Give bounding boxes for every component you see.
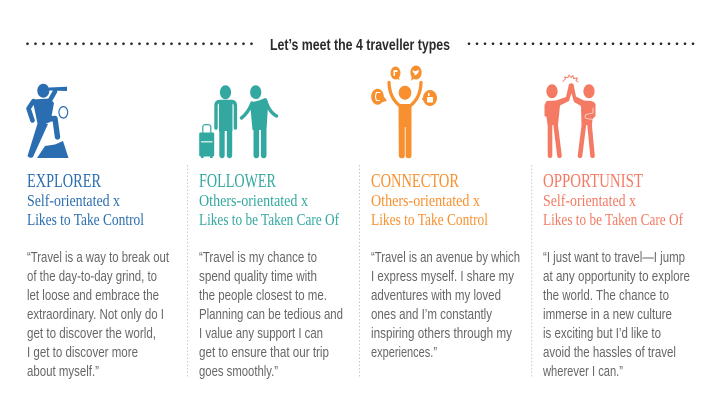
heading: connector: CONNECTOR <box>371 170 459 192</box>
quote: follower: I value any support I can <box>199 326 323 342</box>
icon: two people with suitcase <box>199 85 276 158</box>
quote: connector: experiences.” <box>371 345 437 361</box>
subtitle: connector: Likes to Take Control <box>371 210 488 229</box>
subtitle: opportunist: Likes to be Taken Care Of <box>543 210 683 229</box>
quote: explorer <box>27 250 169 380</box>
subtitle: explorer <box>27 191 144 229</box>
quote: opportunist: avoid the hassles of travel <box>543 345 676 361</box>
icon: two people high-fiving <box>544 75 596 156</box>
quote: opportunist: wherever I can.” <box>542 364 623 380</box>
title: Let’s meet the 4 traveller types <box>270 37 450 54</box>
panel: connector <box>371 66 520 361</box>
quote: explorer: “Travel is a way to break out <box>27 250 169 266</box>
heading: explorer: EXPLORER <box>27 170 101 192</box>
quote: connector: I express myself. I share my <box>371 269 514 285</box>
icon: explorer with telescope on a rock <box>28 84 68 158</box>
quote: opportunist <box>542 250 690 380</box>
quote: opportunist: immerse in a new culture <box>543 307 672 323</box>
subtitle: explorer: Likes to Take Control <box>27 210 144 229</box>
quote: explorer: extraordinary. Not only do I <box>27 307 164 323</box>
quote: connector <box>371 250 520 361</box>
panel: opportunist <box>542 75 690 380</box>
quote: connector: “Travel is an avenue by which <box>371 250 520 266</box>
subtitle: follower: Others-orientated x <box>199 191 309 210</box>
quote: explorer: about myself.” <box>27 364 99 380</box>
heading: follower: FOLLOWER <box>199 170 276 192</box>
heading: opportunist: OPPORTUNIST <box>543 170 643 192</box>
quote: follower: the people closest to me. <box>199 288 327 304</box>
subtitle: connector: Others-orientated x <box>371 191 481 210</box>
quote: follower: “Travel is my chance to <box>199 250 317 266</box>
quote: explorer: get to discover the world, <box>27 326 156 342</box>
icon: person with social media bubbles <box>371 66 437 158</box>
quote: follower: goes smoothly.” <box>199 364 278 380</box>
panel: explorer <box>27 84 169 380</box>
quote: explorer: let loose and embrace the <box>27 288 159 304</box>
quote: opportunist: the world. The chance to <box>543 288 669 304</box>
quote: follower: spend quality time with <box>199 269 317 285</box>
subtitle: connector <box>371 191 488 229</box>
subtitle: follower <box>199 191 339 229</box>
quote: connector: ones and I’m constantly <box>371 307 492 323</box>
subtitle: opportunist: Self-orientated x <box>543 191 637 210</box>
subtitle: follower: Likes to be Taken Care Of <box>199 210 339 229</box>
panel: follower <box>199 85 343 380</box>
quote: connector: inspiring others through my <box>371 326 512 342</box>
quote: explorer: of the day-to-day grind, to <box>27 269 157 285</box>
quote: follower: Planning can be tedious and <box>199 307 343 323</box>
quote: explorer: I get to discover more <box>27 345 138 361</box>
quote: follower <box>199 250 343 380</box>
subtitle: opportunist <box>543 191 683 229</box>
quote: connector: adventures with my loved <box>371 288 501 304</box>
subtitle: explorer: Self-orientated x <box>27 191 121 210</box>
quote: opportunist: is exciting but I’d like to <box>543 326 661 342</box>
quote: follower: get to ensure that our trip <box>199 345 329 361</box>
